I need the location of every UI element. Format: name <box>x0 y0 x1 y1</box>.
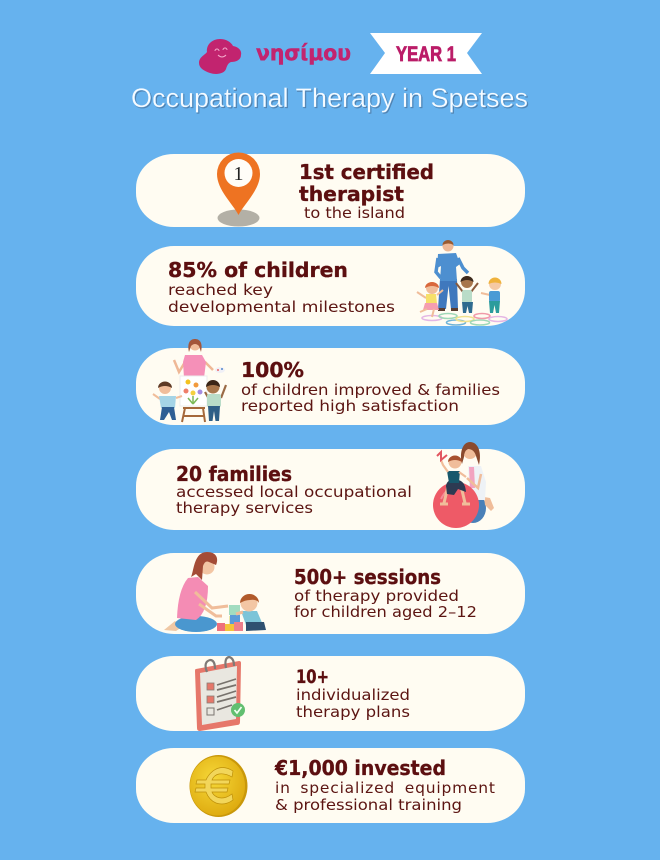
text: 1,000 euro invested: & professional training <box>275 796 462 814</box>
text: 10+ therapy plans: therapy plans <box>296 703 410 721</box>
text: 500+ sessions: of therapy provided <box>294 587 459 605</box>
panel: 500+ sessions <box>136 552 525 634</box>
text: 85% of children: 85% of children <box>168 258 348 282</box>
text: 500+ sessions: 500+ sessions <box>294 565 441 589</box>
text: first certified therapist: 1st certified <box>299 160 434 184</box>
text: 100% of children improved: reported high satisfaction <box>241 397 459 415</box>
title: Occupational Therapy in Spetses <box>131 83 528 113</box>
text: 10+ therapy plans: 10+ <box>296 667 329 688</box>
text: 85% of children <box>168 258 395 316</box>
text: 20 families: therapy services <box>176 499 313 517</box>
logo wordmark: νησίμου <box>256 41 351 65</box>
text: 1,000 euro invested <box>274 756 495 814</box>
text: 1,000 euro invested: in specialized equipment <box>275 779 495 797</box>
panel: 100% improved <box>136 339 525 425</box>
text: 85% of children: reached key <box>168 281 273 299</box>
text: 100% of children improved <box>241 358 500 415</box>
text: 100% of children improved: 100% <box>241 358 304 382</box>
year ribbon <box>370 33 482 74</box>
year ribbon: YEAR 1 <box>396 43 456 66</box>
header: logo, year ribbon <box>199 33 482 74</box>
illustration: teacher painting with two children <box>153 339 226 422</box>
panel: 10+ therapy plans <box>136 656 525 731</box>
text: 500+ sessions <box>294 565 477 621</box>
panel: 1,000 euro invested <box>136 748 525 823</box>
icon: map pin with number 1 <box>217 152 260 226</box>
text: first certified therapist: therapist <box>299 182 404 206</box>
text: 10+ therapy plans: individualized <box>296 686 410 704</box>
text: 1,000 euro invested: €1,000 invested <box>274 756 446 780</box>
text: 20 families <box>176 462 412 517</box>
illustration: therapist with toddler and blocks <box>164 552 266 632</box>
text: 20 families: 20 families <box>176 462 292 486</box>
text: first certified therapist: to the island <box>304 204 405 222</box>
panel: 85% of children <box>136 240 525 326</box>
icon: checklist clipboard <box>195 657 245 731</box>
icon: map pin with number 1: 1 <box>234 163 244 185</box>
text: 100% of children improved: of children improved & families <box>241 381 500 399</box>
panel: first certified therapist <box>136 152 525 227</box>
text: 20 families: accessed local occupational <box>176 483 412 501</box>
text: 85% of children: developmental milestones <box>168 298 395 316</box>
illustration: therapist with three children on hoops <box>417 240 507 325</box>
panel: 20 families <box>136 442 525 530</box>
text: 500+ sessions: for children aged 2–12 <box>294 603 477 621</box>
text: first certified therapist <box>299 160 434 222</box>
icon: smiling cloud logo <box>199 39 241 74</box>
text: 10+ therapy plans <box>296 667 410 721</box>
icon: gold euro coin <box>190 755 248 817</box>
illustration: child on therapy ball with therapist <box>433 442 494 528</box>
